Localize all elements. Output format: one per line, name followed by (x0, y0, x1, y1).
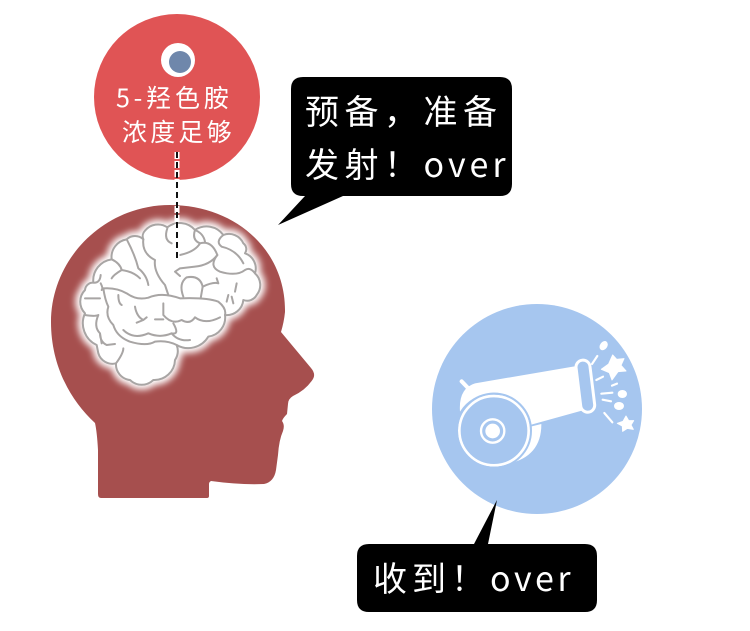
head silhouette (51, 205, 314, 498)
eye icon (161, 43, 195, 77)
red circle badge (94, 14, 260, 180)
badge text: 浓度足够 (122, 113, 235, 149)
blue circle with cannon (432, 304, 642, 514)
bubble text: 预备，准备 (305, 85, 502, 134)
bubble text: 收到！over (373, 552, 574, 601)
brain glow (80, 223, 260, 385)
icon: cannon (457, 339, 634, 468)
bubble text: 发射！over (305, 138, 510, 187)
dashed connector line (174, 152, 180, 262)
brain outline and folds (80, 223, 260, 385)
badge text: 5-羟色胺 (116, 79, 233, 115)
speech bubble: received (357, 500, 597, 612)
badge text (116, 79, 235, 149)
brain (80, 223, 260, 385)
speech bubble: prepare to fire (278, 77, 512, 225)
bubble text (305, 85, 510, 187)
